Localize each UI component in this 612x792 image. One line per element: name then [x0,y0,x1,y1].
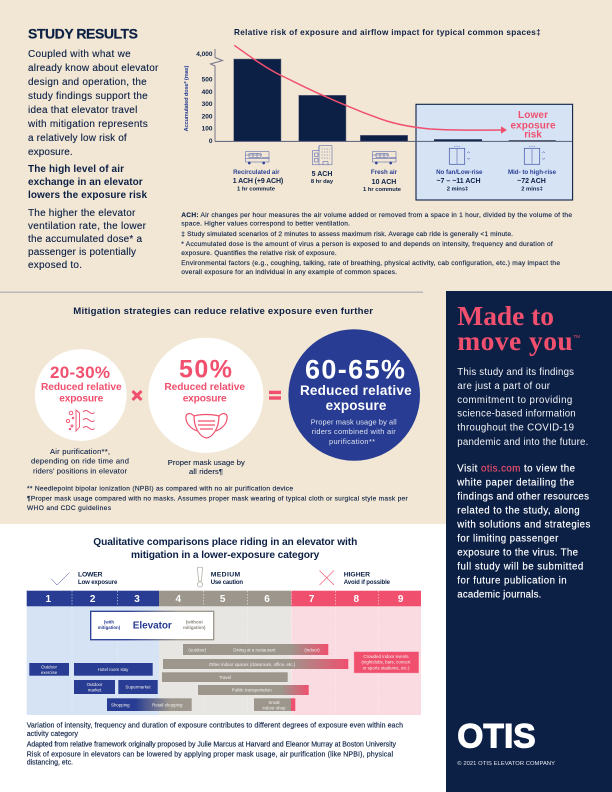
text block: visit otis.com: related to the study, along [457,506,580,517]
text block: commitment [457,367,588,448]
icon: bus recirculated air [246,152,269,164]
text block: commitment: throughout the COVID-19 [457,423,574,434]
text block: visit otis.com: academic journals. [457,590,541,601]
activity: crowded indoor events: Crowded indoor events [363,654,409,659]
scale header numbers: 7 [309,594,315,605]
text block: visit otis.com: exposure to the virus. The [457,548,578,559]
activity: public transportation [198,685,309,695]
y axis: 500 [202,76,213,84]
text block: visit otis.com: with solutions and strategies [456,520,590,531]
panel: mask circle: Reduced relative [164,382,245,393]
activity: outdoor market: market [88,688,102,692]
activity: small indoor shop: Small [269,700,280,705]
lower exposure risk box [416,104,573,200]
panel: study results text [27,26,159,271]
label: office building [311,171,334,185]
activity: crowded indoor events: (nightclubs, bars, concert [361,660,411,665]
activity: outdoor market [74,680,115,694]
heading: made to move you: Made to [457,300,554,331]
activity: other indoor spaces [163,659,348,669]
elevator box [91,611,214,640]
activity: shopping: Shopping [111,703,130,708]
activity: small indoor shop: indoor shop [263,705,286,710]
label: no fan low-rise [436,169,483,192]
caption: air purification [31,447,129,475]
activity: hotel room stay [74,663,153,676]
text block: mitigation footnotes: ¶Proper mask usage compared with no masks. Assumes proper mask wearing of typical cloth or surgical style mask per [27,496,408,503]
label: mid to high-rise [508,169,557,192]
elevator box: mitigation) [183,625,206,630]
text block: visit otis.com: for limiting passenger [457,534,559,545]
text block: intro paragraph: a relatively low risk of [28,133,127,144]
activity: travel: Travel [219,675,231,680]
elevator box: (with [104,620,114,624]
text block: commitment: science-based information [457,409,576,420]
activity: dining at a restaurant: (outdoor) [188,647,207,652]
text block: chart notes: exposure. Quantifies the relative risk of exposure. [181,250,337,257]
panel: mask circle [148,338,263,453]
heading: qualitative comparisons [93,537,357,561]
label: mid to high-rise: ~72 ACH [517,178,546,185]
label: office building: 5 ACH [312,171,332,178]
text block: chart notes: overall exposure for an individual in any example of common spaces. [181,269,397,276]
activity: dining at a restaurant: Dining at a restaurant [233,647,276,652]
y axis: 400 [202,89,213,96]
logo: otis: OTIS [457,718,536,756]
bar chart: relative risk of exposure [184,45,573,200]
icon: elevator mid to high-rise [524,146,545,164]
panel: air purification circle: 20-30% [50,363,110,382]
panel: combined result circle: Reduced relative [300,383,412,398]
text block: commitment: commitment to providing [457,395,572,406]
scale header numbers: 2 [90,594,96,605]
text block: ventilation paragraph [28,208,147,271]
label: no fan low-rise: 2 mins‡ [447,186,468,192]
panel: mask circle: 50% [179,356,232,384]
activity: crowded indoor events: or sports stadiums, etc.) [363,666,410,670]
text block: visit otis.com: full study will be submitted [457,562,583,573]
label: fresh air: Fresh air [371,169,398,176]
text block: commitment: are just a part of our [457,381,551,392]
text block: ventilation paragraph: exposed to. [28,260,82,271]
text block: commitment: This study and its findings [457,367,574,378]
text block: visit otis.com: for future publication in [457,576,567,587]
heading: made to move you: TM [574,334,580,339]
caption: air purification: riders’ positions in elevator [33,466,127,475]
callout: lower exposure risk: Lower [518,110,548,121]
caption: mask usage [168,458,245,476]
label: fresh air: 10 ACH [372,179,396,186]
scale header numbers: 6 [264,594,270,605]
legend: medium exposure: MEDIUM [211,572,241,579]
activity: dining at a restaurant [183,644,328,655]
legend: medium exposure: Use caution [211,580,243,586]
panel: air purification circle [35,349,127,441]
text block: visit otis.com: white paper detailing the [456,478,574,489]
legend: lower exposure: Low exposure [78,580,118,586]
text block: intro paragraph: design and operation, the [28,77,147,88]
chart: exposure scale [27,591,421,715]
legend: higher exposure: HIGHER [344,572,370,579]
scale background zones [27,606,421,715]
panel: made to move you [446,291,612,792]
y axis [196,49,222,145]
icon: equals sign [269,391,281,400]
callout: lower exposure risk: risk [524,130,542,140]
text block: scale notes [27,723,403,767]
activity: outdoor exercise: Outdoor [41,665,57,670]
activity: other indoor spaces: Other indoor spaces (classroom, office, etc.) [209,662,296,667]
activity: outdoor exercise [29,663,69,676]
activity: supermarket [118,680,158,694]
label: recirculated air: Recirculated air [233,169,280,176]
text block: ventilation paragraph: The higher the elevator [28,208,136,219]
caption: air purification: Air purification**, [50,447,110,456]
scale header numbers: 9 [398,594,404,605]
panel: combined result circle: 60-65% [305,354,405,384]
legend: lower exposure: LOWER [78,572,103,579]
copyright: © 2021 OTIS ELEVATOR COMPANY [457,760,555,767]
panel: combined result circle: Proper mask usage by all [311,418,397,426]
heading: qualitative comparisons: Qualitative comparisons place riding in an elevator with [93,537,357,548]
caption: mask usage: all riders¶ [189,467,223,476]
legend: higher exposure: Avoid if possible [344,580,391,586]
caption: air purification: depending on ride time and [31,456,129,465]
caption: mask usage: Proper mask usage by [168,458,245,467]
text block: chart notes: * Accumulated dose is the amount of virus a person is exposed to and depends on intensity, frequency and duration of [181,241,553,248]
icon: bus fresh air [372,152,396,164]
y axis: 0 [209,138,213,145]
panel: mask circle: exposure [183,394,227,405]
bars [234,59,556,141]
text block: mitigation footnotes: WHO and CDC guidelines [27,505,112,512]
scale header numbers: 3 [134,594,140,605]
text block: intro paragraph: study findings support the [28,91,148,102]
activity: shopping: Retail shopping [152,703,183,708]
chart title: Relative risk of exposure and airflow impact for typical common spaces‡ [234,28,541,37]
label: recirculated air [233,169,283,193]
label: mid to high-rise: 2 mins‡ [521,186,543,192]
activity: outdoor exercise: exercise [41,670,58,675]
activity: public transportation: Public transportation [232,688,272,693]
text block: chart notes: space. Higher values correspond to better ventilation. [181,220,350,228]
callout: lower exposure risk [510,110,556,140]
y axis: 4,000 [196,51,213,58]
text block: scale notes: Adapted from relative framework originally proposed by Julie Marcus at Harvard and Eleanor Murray at Boston University [27,742,396,749]
text block: visit otis.com [456,464,590,601]
elevator box: mitigation) [98,625,121,630]
text block: bold statement: lowers the exposure risk [28,190,147,201]
text block: mitigation footnotes [27,486,408,512]
heading: study results: STUDY RESULTS [28,26,138,42]
text block: visit otis.com: Visit otis.com to view the [457,464,575,475]
panel: combined result circle: purification** [329,437,375,446]
label: recirculated air: 1 hr commute [237,187,276,193]
text block: intro paragraph: exposure. [28,147,73,158]
label: no fan low-rise: ~7 – ~11 ACH [436,178,481,185]
text block: scale notes: Variation of intensity, frequency and duration of exposure contributes to different degrees of exposure even within each [27,723,403,730]
y axis: 300 [202,101,213,108]
elevator box: Elevator [133,621,172,632]
icon: air purification [66,410,94,431]
heading: made to move you: move you [457,325,573,356]
panel: air purification circle: exposure [59,394,104,405]
activity: dining at a restaurant: (indoor) [304,647,320,652]
label: office building: 8 hr day [311,179,334,185]
activity: small indoor shop [254,698,295,711]
callout: lower exposure risk: exposure [510,120,556,131]
scale header numbers: 1 [46,594,52,605]
text block: intro paragraph: with mitigation represents [27,119,148,130]
y axis: 100 [202,126,213,133]
scale header numbers: 5 [220,594,226,605]
text block: scale notes: activity category [27,731,78,738]
y axis label: Accumulated dose* (max) [184,65,190,132]
activity: crowded indoor events [354,652,419,673]
text block: bold statement [28,164,147,201]
text block: chart notes: ACH: Air changes per hour measures the air volume added or removed from a space in 1 hour, divided by the volume of the [181,212,572,219]
heading: mitigation strategies: Mitigation strategies can reduce relative exposure even further [73,306,373,317]
text block: visit otis.com: findings and other resources [457,492,589,503]
scale header numbers [27,591,421,606]
scale header numbers: 4 [176,594,182,605]
activity: shopping [107,698,192,711]
icon: elevator low-rise [449,146,470,164]
activity: travel [162,672,288,682]
legend: higher exposure [320,570,391,586]
text block: intro paragraph: idea that elevator travel [28,105,137,116]
panel: combined result circle [288,329,420,461]
text block: intro paragraph: Coupled with what we [28,49,131,60]
elevator box: (without [186,620,203,624]
panel: combined result circle: riders combined with air [312,427,396,436]
icon: face mask [186,414,227,438]
activity: hotel room stay: Hotel room stay [98,667,129,672]
text block: chart notes [181,212,572,276]
text block: commitment: pandemic and into the future. [457,437,588,448]
legend: lower exposure [52,572,118,586]
label: recirculated air: 1 ACH (+9 ACH) [233,178,283,185]
icon: office building [312,146,332,165]
panel: combined result circle: exposure [326,398,387,413]
label: no fan low-rise: No fan/Low-rise [436,169,483,176]
scale header numbers: 8 [354,594,360,605]
text block: chart notes: ‡ Study simulated scenarios of 2 minutes to assess maximum risk. Average cab ride is generally <1 minute. [181,231,513,238]
icon: multiply sign [132,390,142,401]
text block: scale notes: Risk of exposure in elevators can be lowered by applying proper mask usage, air purification (like NPBI), physical [27,752,393,759]
heading: made to move you [457,300,580,356]
legend: medium exposure [197,568,243,587]
text block: bold statement: The high level of air [28,164,124,175]
text block: intro paragraph: already know about elevator [28,63,159,74]
activity: outdoor market: Outdoor [87,682,103,687]
label: fresh air [363,169,402,193]
text block: ventilation paragraph: the accumulated dose* a [28,234,142,245]
text block: chart notes: Environmental factors (e.g., coughing, talking, rate of breathing, physical activity, cab configuration, etc.) may impact the [181,260,560,267]
activity: supermarket: Supermarket [125,685,151,690]
y axis: 200 [202,114,213,121]
text block: ventilation paragraph: passenger is potentially [28,247,136,258]
text block: mitigation footnotes: ** Needlepoint bipolar ionization (NPBI) as compared with no air purification device [27,486,293,493]
label: mid to high-rise: Mid- to high-rise [508,169,557,176]
risk curve with arrow [234,45,507,134]
label: fresh air: 1 hr commute [363,187,402,193]
text block: intro paragraph [27,49,159,158]
text block: ventilation paragraph: ventilation rate, the lower [28,221,147,232]
text block: bold statement: exchange in an elevator [28,177,143,188]
panel: air purification circle: Reduced relative [41,382,122,393]
heading: qualitative comparisons: mitigation in a lower-exposure category [131,550,320,561]
text block: scale notes: distancing, etc. [27,760,73,767]
